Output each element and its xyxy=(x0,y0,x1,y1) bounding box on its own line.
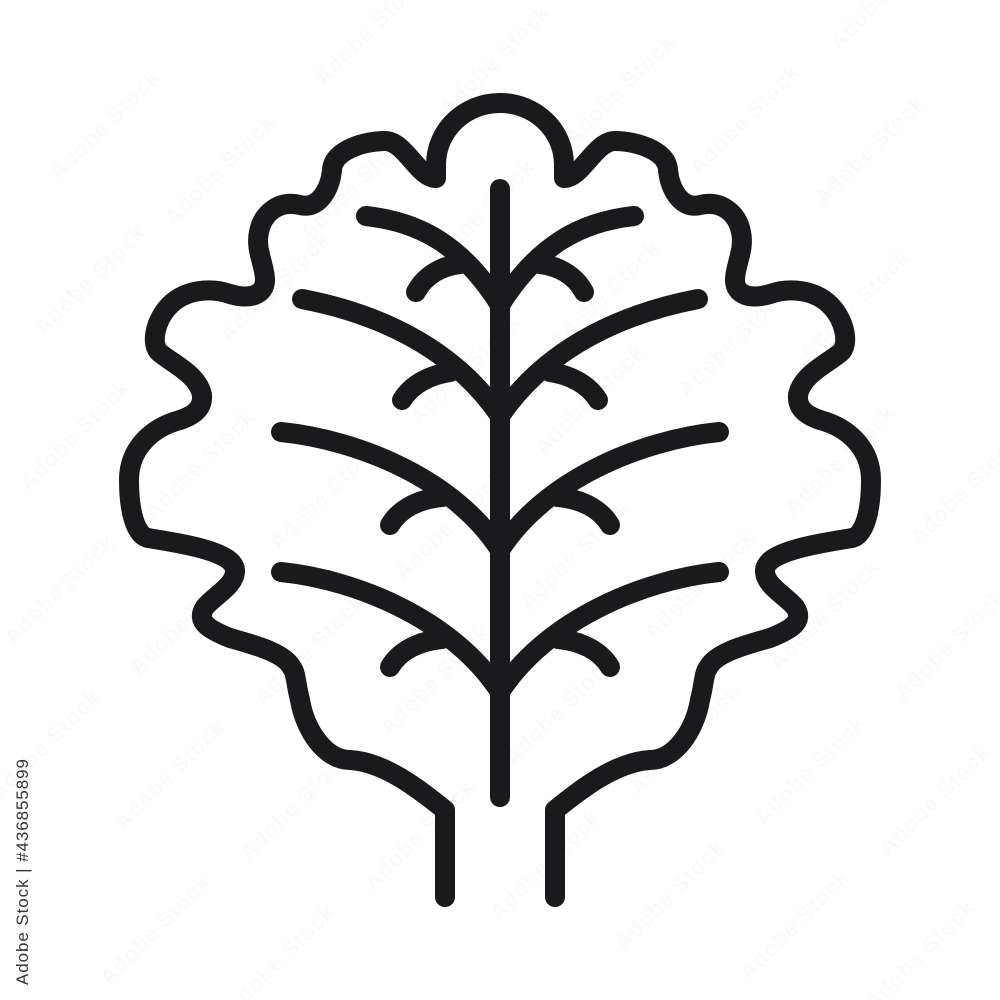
illustration: lettuce leaf line icon: Adobe Stock xyxy=(44,64,165,185)
illustration: lettuce leaf line icon: Adobe Stock xyxy=(434,0,555,120)
illustration: lettuce leaf line icon: Adobe Stock xyxy=(29,219,150,340)
illustration: lettuce leaf line icon: Adobe Stock xyxy=(359,774,480,895)
illustration: lettuce leaf line icon: Adobe Stock xyxy=(234,744,355,865)
veins: left side xyxy=(281,216,500,692)
illustration: lettuce leaf line icon: Adobe Stock xyxy=(874,739,995,860)
illustration: lettuce leaf line icon: Adobe Stock xyxy=(779,399,900,520)
illustration: lettuce leaf line icon: Adobe Stock xyxy=(672,281,793,402)
illustration: lettuce leaf line icon: Adobe Stock xyxy=(514,494,635,615)
illustration: lettuce leaf line icon: Adobe Stock xyxy=(249,589,370,710)
illustration: lettuce leaf line icon: Adobe Stock xyxy=(419,154,540,275)
leaf outline: left half xyxy=(129,103,500,897)
leaf outline and veins xyxy=(129,103,871,897)
illustration: lettuce leaf line icon: Adobe Stock xyxy=(159,109,280,230)
illustration: lettuce leaf line icon: Adobe Stock xyxy=(809,89,930,210)
illustration: lettuce leaf line icon: Adobe Stock xyxy=(404,309,525,430)
illustration: lettuce leaf line icon: Adobe Stock xyxy=(139,404,260,525)
illustration: lettuce leaf line icon: Adobe Stock xyxy=(374,619,495,740)
veins: right side xyxy=(500,216,719,692)
illustration: lettuce leaf line icon: Adobe Stock xyxy=(529,339,650,460)
illustration: lettuce leaf line icon: Adobe Stock xyxy=(559,29,680,150)
illustration: lettuce leaf line icon: Adobe Stock xyxy=(734,864,855,985)
illustration: lettuce leaf line icon: Adobe Stock xyxy=(214,226,335,347)
illustration: lettuce leaf line icon: Adobe Stock xyxy=(499,649,620,770)
illustration: lettuce leaf line icon: Adobe Stock xyxy=(609,834,730,955)
stock image credit: Adobe Stock | #436855899 xyxy=(13,759,32,985)
leaf outline: right half xyxy=(500,103,871,897)
illustration: lettuce leaf line icon: Adobe Stock xyxy=(764,554,885,675)
illustration: lettuce leaf line icon: Adobe Stock xyxy=(124,559,245,680)
illustration: lettuce leaf line icon: Adobe Stock xyxy=(294,124,415,245)
illustration: lettuce leaf line icon: Adobe Stock xyxy=(94,869,215,990)
illustration: lettuce leaf line icon: Adobe Stock xyxy=(109,714,230,835)
illustration: lettuce leaf line icon: Adobe Stock xyxy=(684,59,805,180)
illustration: lettuce leaf line icon: Adobe Stock xyxy=(0,529,120,650)
illustration: lettuce leaf line icon: Adobe Stock xyxy=(749,709,870,830)
illustration: lettuce leaf line icon: Adobe Stock xyxy=(639,524,760,645)
illustration: lettuce leaf line icon: Adobe Stock xyxy=(264,434,385,555)
illustration: lettuce leaf line icon: Adobe Stock xyxy=(794,244,915,365)
illustration: lettuce leaf line icon: Adobe Stock xyxy=(484,804,605,925)
illustration: lettuce leaf line icon: Adobe Stock xyxy=(14,374,135,495)
illustration: lettuce leaf line icon: Adobe Stock xyxy=(624,679,745,800)
central stem xyxy=(490,189,510,797)
illustration: lettuce leaf line icon: Adobe Stock xyxy=(544,234,665,355)
illustration: lettuce leaf line icon: Adobe Stock xyxy=(389,464,510,585)
